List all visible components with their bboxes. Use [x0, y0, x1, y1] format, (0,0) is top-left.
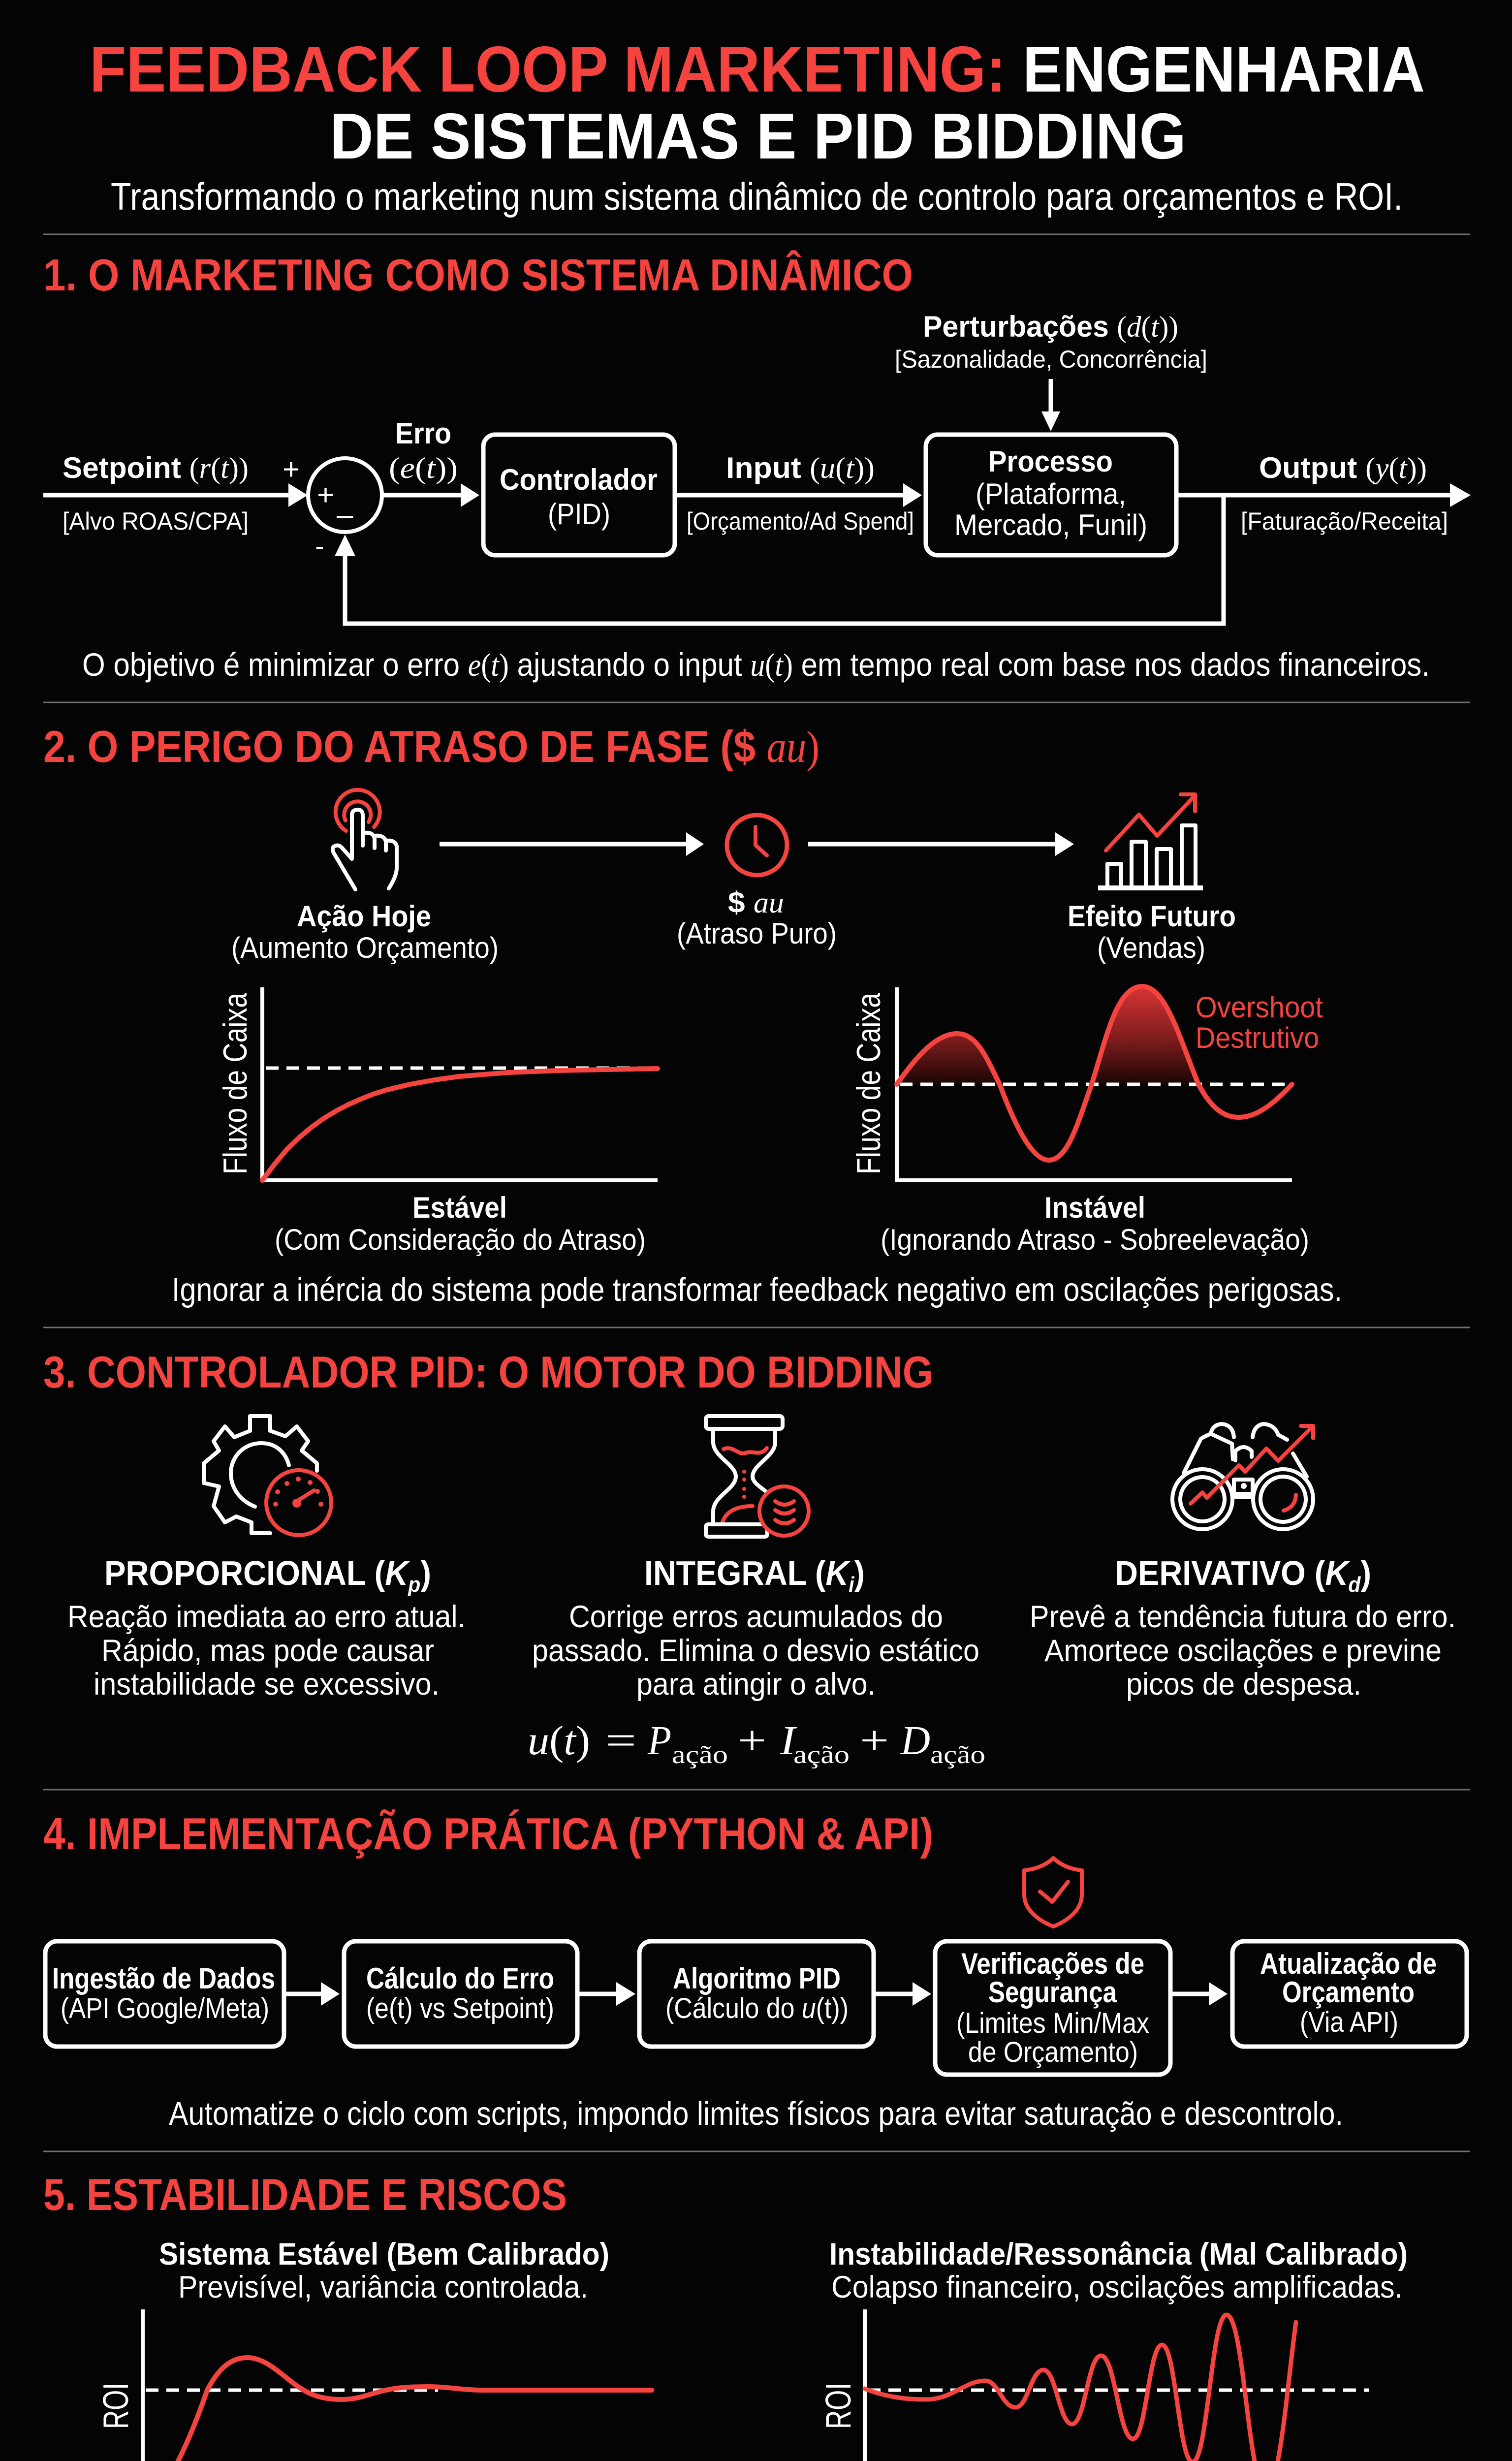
- column: derivative: Prevê a tendência futura do erro.: [1030, 1600, 1456, 1634]
- label: stable system: [159, 2237, 609, 2304]
- label: input: [Orçamento/Ad Spend]: [687, 507, 914, 535]
- box: process: (Plataforma,: [976, 477, 1126, 510]
- arrow: step 1 to 2: [284, 1982, 340, 2006]
- title: DE SISTEMAS E PID BIDDING: [330, 100, 1186, 172]
- box: budget update: Orçamento: [1282, 1976, 1415, 2009]
- chart: stable ROI: ROI: [96, 2383, 136, 2429]
- panel: section 1 feedback diagram: [43, 250, 1471, 683]
- box: data ingestion: [45, 1941, 284, 2047]
- box: data ingestion: Ingestão de Dados: [52, 1962, 275, 1995]
- label: future effect: (Vendas): [1097, 931, 1205, 964]
- panel: section 4 implementation: [43, 1809, 1467, 2132]
- heading: section 1: 1. O MARKETING COMO SISTEMA DINÂMICO: [43, 250, 913, 300]
- formula: PID sum: +: [738, 1718, 766, 1764]
- column: integral: ): [854, 1554, 865, 1592]
- title: FEEDBACK LOOP MARKETING: ENGENHARIA: [90, 33, 1425, 105]
- formula: PID sum: u(t): [528, 1718, 590, 1764]
- formula: PID sum: [528, 1718, 985, 1769]
- column: proportional: Rápido, mas pode causar: [101, 1634, 434, 1668]
- label: disturbances: [895, 310, 1207, 373]
- formula: PID sum: I: [780, 1718, 797, 1764]
- chart: unstable ROI: [819, 2309, 1374, 2461]
- formula: PID sum: ação: [930, 1741, 985, 1769]
- label: destructive overshoot: [1196, 991, 1323, 1054]
- box: safety checks: (Limites Min/Max: [956, 2007, 1149, 2039]
- label: output: [Faturação/Receita]: [1241, 507, 1448, 535]
- heading: section 4: 4. IMPLEMENTAÇÃO PRÁTICA (PYTHON & API): [43, 1809, 933, 1859]
- column: integral: [532, 1554, 979, 1702]
- box: process: Mercado, Funil): [954, 508, 1147, 541]
- panel: section 2 phase delay: [43, 722, 1342, 1308]
- heading: section 5: 5. ESTABILIDADE E RISCOS: [43, 2170, 567, 2220]
- formula: PID sum: ação: [793, 1741, 850, 1769]
- label: unstable system: Colapso financeiro, oscilações amplificadas.: [831, 2270, 1403, 2304]
- label: destructive overshoot: Destrutivo: [1196, 1021, 1319, 1054]
- label: disturbances: Perturbações (d(t)): [923, 310, 1178, 343]
- icon: clock: [727, 815, 787, 875]
- heading: section 2: 2. O PERIGO DO ATRASO DE FASE ($ au): [43, 722, 819, 772]
- label: input: Input (u(t)): [726, 451, 875, 484]
- label: error: Erro: [395, 417, 451, 450]
- label: action today: Ação Hoje: [297, 900, 431, 933]
- label: error: [389, 417, 458, 484]
- box: safety checks: Verificações de: [961, 1947, 1144, 1980]
- box: error calculation: [344, 1941, 577, 2047]
- column: derivative: ): [1360, 1554, 1371, 1592]
- icon: tapping hand: [333, 790, 397, 889]
- chart: unstable cash flow: [850, 986, 1323, 1180]
- label: pure delay: (Atraso Puro): [677, 917, 837, 950]
- heading: section 3: 3. CONTROLADOR PID: O MOTOR DO BIDDING: [43, 1348, 933, 1397]
- column: integral: passado. Elimina o desvio estático: [532, 1634, 979, 1668]
- chart: stable cash flow: [217, 987, 658, 1180]
- box: controller: (PID): [548, 498, 610, 531]
- label: unstable: (Ignorando Atraso - Sobreelevação): [881, 1223, 1309, 1256]
- box: error calculation: Cálculo do Erro: [366, 1962, 554, 1995]
- formula: PID sum: =: [605, 1718, 636, 1764]
- box: safety checks: [935, 1941, 1170, 2075]
- column: proportional: Reação imediata ao erro atual.: [67, 1600, 466, 1634]
- box: safety checks: de Orçamento): [968, 2036, 1138, 2068]
- column: proportional: p: [408, 1573, 420, 1597]
- arrow: step 3 to 4: [876, 1982, 931, 2006]
- panel: section 5 stability and risks: [43, 2170, 1435, 2461]
- column: integral: para atingir o alvo.: [636, 1667, 876, 1702]
- column: proportional: ): [420, 1554, 431, 1592]
- box: budget update: (Via API): [1300, 2006, 1398, 2038]
- column: proportional: [67, 1554, 466, 1702]
- summing junction: +: [283, 453, 300, 486]
- arrow: step 2 to 3: [579, 1982, 635, 2006]
- caption: section 4: Automatize o ciclo com scripts, impondo limites físicos para evitar saturação e descontrolo.: [169, 2095, 1343, 2132]
- label: disturbances: [Sazonalidade, Concorrência]: [895, 346, 1207, 373]
- box: PID algorithm: (Cálculo do u(t)): [665, 1992, 849, 2024]
- caption: section 1: O objetivo é minimizar o erro e(t) ajustando o input u(t) em tempo real com base nos dados financeiros.: [82, 646, 1430, 683]
- arrow: output: [1178, 483, 1471, 507]
- box: error calculation: (e(t) vs Setpoint): [366, 1992, 554, 2024]
- column: proportional: PROPORCIONAL (K: [104, 1554, 410, 1592]
- arrow: step 4 to 5: [1172, 1982, 1228, 2006]
- label: unstable: Instável: [1044, 1191, 1145, 1224]
- box: safety checks: Segurança: [988, 1976, 1117, 2009]
- label: setpoint: Setpoint (r(t)): [63, 451, 249, 484]
- caption: section 2: Ignorar a inércia do sistema pode transformar feedback negativo em oscilações perigosas.: [172, 1271, 1342, 1308]
- label: action today: (Aumento Orçamento): [231, 931, 499, 964]
- label: unstable system: Instabilidade/Ressonância (Mal Calibrado): [829, 2237, 1408, 2272]
- label: output: [1241, 451, 1448, 535]
- summing junction: +: [317, 478, 334, 511]
- box: data ingestion: (API Google/Meta): [61, 1992, 269, 2024]
- chart: stable ROI: [96, 2309, 652, 2461]
- label: error: (e(t)): [389, 452, 458, 484]
- label: stable: Estável: [412, 1191, 507, 1224]
- column: derivative: Amortece oscilações e previne: [1044, 1634, 1442, 1668]
- label: input: [687, 451, 914, 535]
- label: stable system: Sistema Estável (Bem Calibrado): [159, 2237, 609, 2272]
- label: stable system: Previsível, variância controlada.: [178, 2270, 588, 2304]
- column: derivative: picos de despesa.: [1126, 1667, 1361, 1702]
- label: setpoint: [Alvo ROAS/CPA]: [63, 507, 249, 535]
- icon: gear with gauge: [204, 1416, 331, 1535]
- column: integral: i: [849, 1573, 854, 1597]
- icon: security shield: [1024, 1858, 1082, 1926]
- chart: unstable ROI: ROI: [819, 2383, 858, 2429]
- formula: PID sum: P: [647, 1718, 671, 1764]
- label: pure delay: $ au: [728, 886, 784, 919]
- arrow: delay to effect: [808, 832, 1074, 856]
- arrow: error to controller: [383, 483, 479, 507]
- box: PID algorithm: Algoritmo PID: [673, 1962, 841, 1995]
- chart: stable cash flow: Fluxo de Caixa: [217, 993, 254, 1174]
- box: controller: [483, 435, 675, 555]
- label: output: Output (y(t)): [1259, 451, 1427, 484]
- box: budget update: [1232, 1941, 1467, 2047]
- label: stable: [275, 1191, 646, 1256]
- label: future effect: Efeito Futuro: [1068, 900, 1236, 933]
- arrow: action to delay: [440, 832, 704, 856]
- arrow: disturbance to process: [1041, 379, 1060, 431]
- box: process: [926, 435, 1176, 555]
- summing junction: [283, 453, 382, 561]
- label: stable: (Com Consideração do Atraso): [275, 1223, 646, 1256]
- box: PID algorithm: [639, 1941, 874, 2047]
- column: derivative: d: [1348, 1573, 1361, 1597]
- column: proportional: instabilidade se excessivo.: [94, 1667, 440, 1702]
- label: action today: [231, 900, 499, 964]
- box: controller: Controlador: [500, 463, 658, 496]
- label: pure delay: [677, 886, 837, 950]
- column: integral: INTEGRAL (K: [644, 1554, 850, 1592]
- box: budget update: Atualização de: [1260, 1947, 1437, 1980]
- box: process: Processo: [988, 445, 1113, 478]
- summing junction: –: [337, 498, 353, 531]
- label: setpoint: [63, 451, 249, 535]
- icon: binoculars with rising arrow: [1172, 1424, 1313, 1529]
- label: future effect: [1068, 900, 1236, 964]
- arrow: input: [677, 483, 922, 507]
- column: derivative: [1030, 1554, 1456, 1702]
- icon: hourglass with coins: [706, 1416, 809, 1537]
- icon: growth bar chart: [1098, 794, 1203, 888]
- arrow: setpoint: [43, 483, 308, 507]
- chart: unstable cash flow: Fluxo de Caixa: [850, 993, 887, 1174]
- formula: PID sum: D: [900, 1718, 930, 1764]
- arrow: feedback path: [335, 495, 1224, 624]
- label: destructive overshoot: Overshoot: [1196, 991, 1323, 1024]
- summing junction: -: [315, 530, 324, 561]
- panel: section 3 PID controller: [43, 1348, 1456, 1769]
- label: unstable system: [829, 2237, 1408, 2304]
- label: unstable: [881, 1191, 1309, 1256]
- title: [90, 33, 1425, 172]
- formula: PID sum: ação: [672, 1741, 728, 1769]
- formula: PID sum: +: [860, 1718, 889, 1764]
- column: derivative: DERIVATIVO (K: [1115, 1554, 1350, 1592]
- column: integral: Corrige erros acumulados do: [569, 1600, 943, 1634]
